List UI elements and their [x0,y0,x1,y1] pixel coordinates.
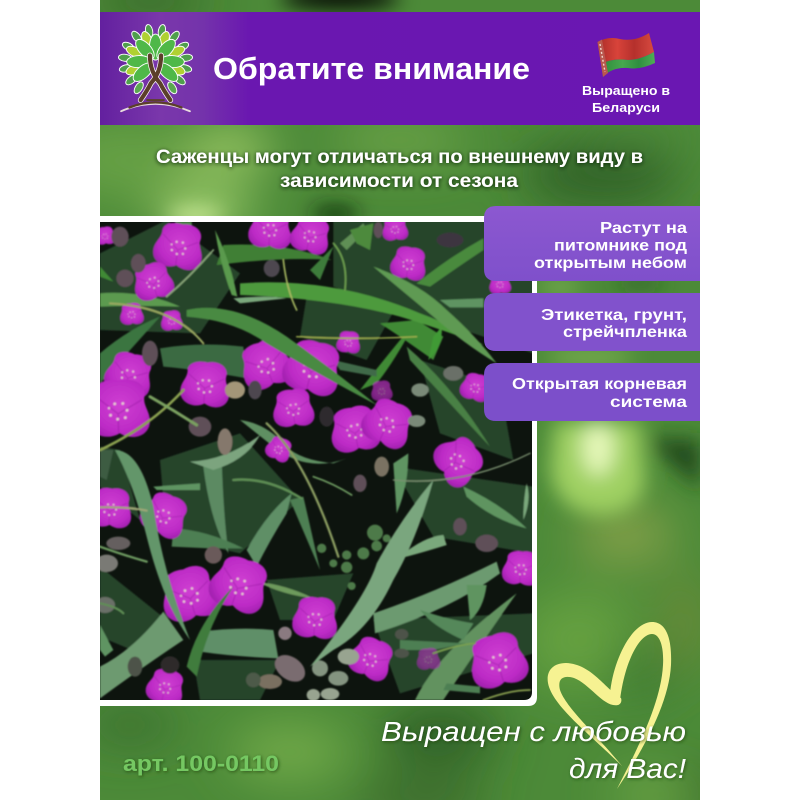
seed cluster [317,525,391,590]
info pill: open root system: Открытая корневая [512,376,687,393]
icon: hand-drawn heart [548,622,671,789]
flowers [417,648,440,670]
label: grown in Belarus: Беларуси [592,100,660,115]
label: grown in Belarus: Выращено в [582,83,670,98]
info pill: label, soil, stretch film: стрейчпленка [563,324,687,341]
subtitle note: зависимости от сезона [280,171,518,192]
logo: tree [118,24,193,111]
info pill: grown outdoors [484,206,700,281]
photo frame [100,216,537,706]
title: Обратите внимание [213,51,530,86]
slogan [381,716,686,784]
info pill: open root system [484,363,700,421]
subtitle note [156,147,643,192]
icon: Belarus flag [598,33,655,77]
info pill: open root system: система [610,394,687,411]
info pill: grown outdoors: Растут на [600,220,687,237]
info pill: label, soil, stretch film [484,293,700,351]
info pill: grown outdoors: питомнике под [554,238,687,254]
photo: spiderwort flowers and leaves [100,222,532,700]
subtitle note: Саженцы могут отличаться по внешнему виду в [156,147,643,168]
slogan: Выращен с любовью [381,716,686,747]
slogan: для Вас! [569,753,686,784]
info pill: label, soil, stretch film: Этикетка, грунт, [541,307,687,324]
info pill: grown outdoors: открытым небом [534,255,687,272]
dark foliage underlay [100,220,533,700]
top blades [115,450,190,640]
label: grown in Belarus [582,83,670,115]
header banner [100,12,700,125]
article number: арт. 100-0110 [123,751,279,776]
page background: green bokeh [100,0,700,800]
buds [95,222,498,701]
